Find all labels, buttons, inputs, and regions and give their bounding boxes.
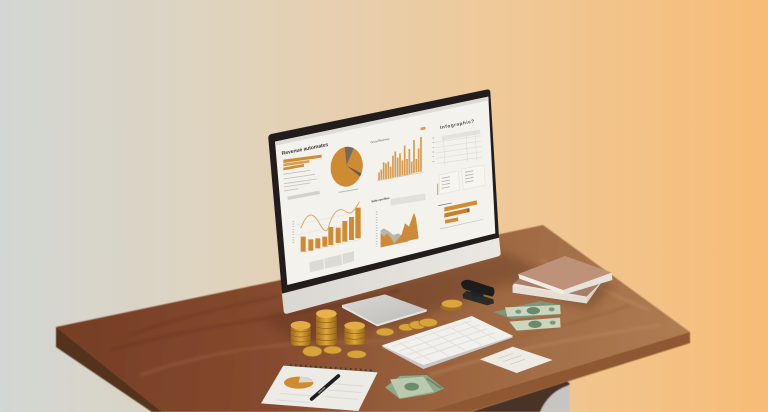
screen bbox=[275, 97, 495, 285]
screen header strip bbox=[275, 97, 489, 146]
monitor bezel bbox=[268, 90, 499, 294]
data table bbox=[433, 130, 482, 166]
shadow under books bbox=[505, 265, 615, 310]
period badge bbox=[420, 127, 426, 130]
monitor bbox=[268, 90, 501, 326]
coin stack tall bbox=[316, 309, 337, 345]
combo bar and line chart bbox=[293, 202, 362, 253]
top bar chart: Gross Revenue bbox=[370, 137, 390, 144]
text placeholder lines bbox=[283, 170, 317, 191]
top-left horizontal bars bbox=[283, 155, 322, 170]
area chart: Sales profiles bbox=[371, 196, 390, 203]
cash bottom stack bbox=[509, 318, 561, 331]
desk objects bbox=[261, 256, 612, 411]
right panel heading: Infographic? bbox=[440, 118, 475, 130]
small legend panels bbox=[438, 165, 485, 195]
stapler bbox=[461, 280, 495, 305]
right horizontal bar chart bbox=[438, 200, 483, 229]
loose coins bbox=[303, 318, 438, 358]
notebook bbox=[261, 365, 378, 411]
books bbox=[513, 256, 612, 303]
keyboard bbox=[382, 316, 513, 369]
pie caption bbox=[339, 189, 358, 192]
cash pile front bbox=[385, 375, 444, 399]
monitor stand base bbox=[342, 294, 427, 326]
wood grain bbox=[110, 260, 660, 375]
pie chart bbox=[328, 145, 365, 189]
shadow under monitor bbox=[262, 252, 540, 345]
area chart bbox=[371, 193, 426, 247]
summary boxes bbox=[309, 251, 354, 272]
cash top stack bbox=[493, 301, 561, 319]
coin pile near stapler bbox=[440, 300, 462, 311]
monitor chin bbox=[282, 238, 501, 314]
top bar chart bbox=[370, 137, 423, 181]
coin stack left bbox=[291, 321, 311, 346]
progress slider bbox=[287, 191, 320, 200]
desk leg bbox=[470, 381, 570, 412]
dashboard title: Revenue automates bbox=[281, 142, 329, 157]
desk bbox=[56, 225, 690, 412]
note card bbox=[480, 347, 553, 373]
coin stack right bbox=[344, 322, 365, 345]
